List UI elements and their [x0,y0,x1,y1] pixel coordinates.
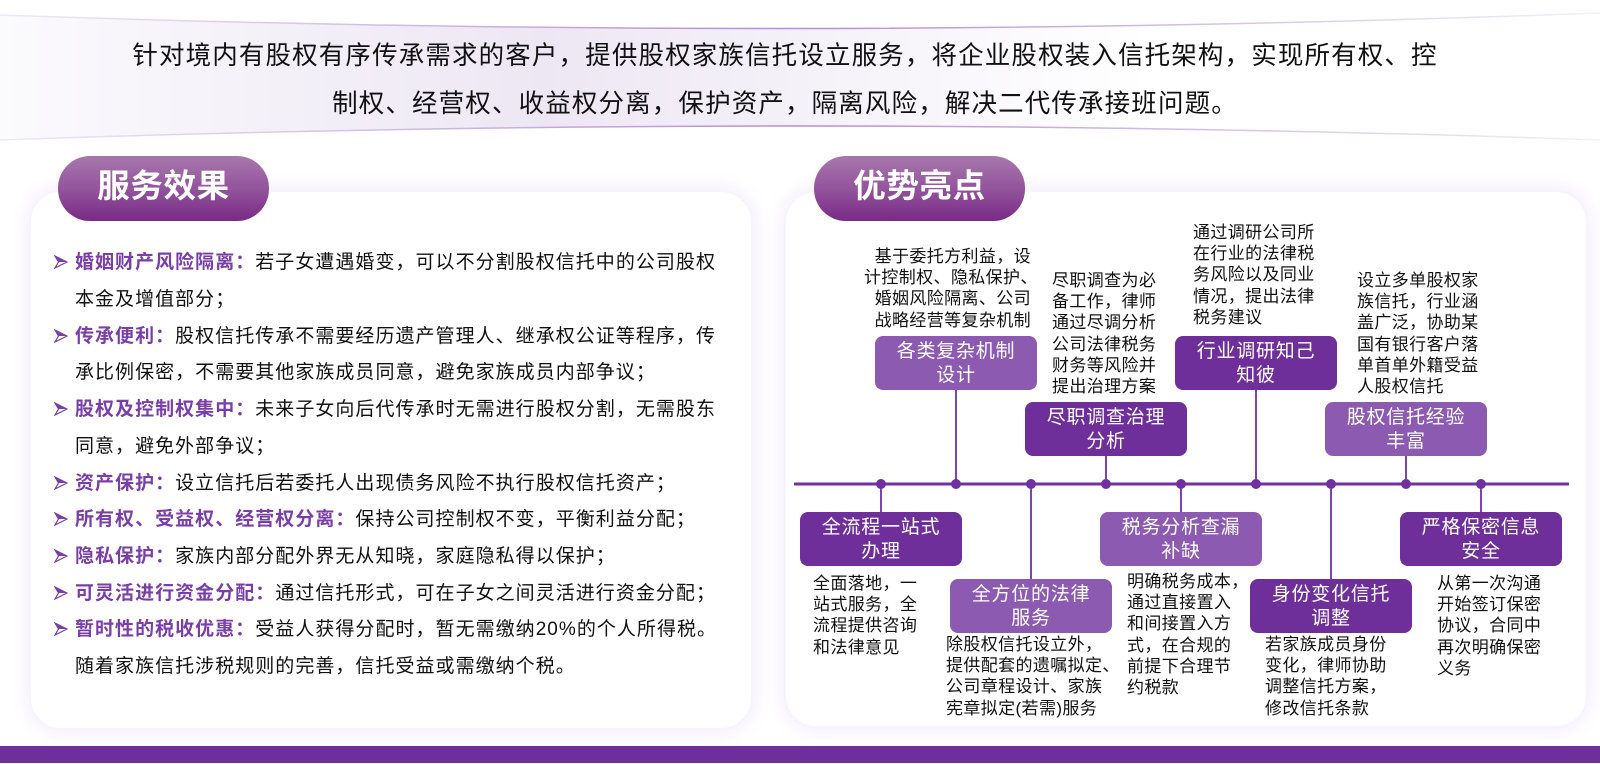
service effects list: 承比例保密，不需要其他家族成员同意，避免家族成员内部争议； [75,362,656,383]
service effects list: 婚姻财产风险隔离：若子女遭遇婚变，可以不分割股权信托中的公司股权 [75,252,716,273]
text: tax analysis [1127,572,1249,697]
node: confidentiality: 安全 [1461,540,1501,562]
node: due diligence: 尽职调查治理 [1047,406,1165,428]
text: due diligence: 提出治理方案 [1052,377,1156,396]
node: legal services [950,579,1112,633]
node: trust experience: 股权信托经验 [1347,406,1465,428]
text: one-stop service [813,574,917,657]
node: complex mechanism design [875,336,1037,390]
node: identity change [1250,579,1412,633]
text: legal services: 宪章拟定(若需)服务 [946,699,1097,718]
service effects list: 同意，避免外部争议； [75,436,275,457]
text: legal services: 提供配套的遗嘱拟定、 [946,656,1120,675]
node: tax analysis [1100,512,1262,566]
node: identity change: 调整 [1311,608,1351,628]
service effects list: 隐私保护：家族内部分配外界无从知晓，家庭隐私得以保护； [75,546,616,567]
text: trust experience: 单首单外籍受益 [1357,356,1479,375]
node: tax analysis: 补缺 [1161,540,1201,562]
text: one-stop service: 和法律意见 [813,638,900,657]
text: one-stop service: 流程提供咨询 [813,616,917,635]
text: legal services: 公司章程设计、家族 [946,677,1102,696]
text: complex mechanism design: 基于委托方利益，设 [875,247,1031,266]
text: complex mechanism design: 婚姻风险隔离、公司 [875,289,1031,308]
text: due diligence: 通过尽调分析 [1052,313,1156,332]
service effects list: 传承便利：股权信托传承不需要经历遗产管理人、继承权公证等程序，传 [75,326,716,347]
node: complex mechanism design: 设计 [936,364,976,386]
text: industry research: 税务建议 [1193,308,1263,327]
text: due diligence: 尽职调查为必 [1052,271,1156,290]
text: confidentiality: 从第一次沟通 [1437,574,1541,593]
timeline chart [794,390,1569,579]
node: complex mechanism design: 各类复杂机制 [897,340,1015,362]
node: legal services: 服务 [1011,608,1051,628]
intro banner [0,12,1600,141]
text: tax analysis: 式，在合规的 [1127,636,1231,655]
intro banner: 制权、经营权、收益权分离，保护资产，隔离风险，解决二代传承接班问题。 [332,90,1238,118]
text: confidentiality: 协议，合同中 [1437,616,1541,635]
text: trust experience: 人股权信托 [1357,377,1444,396]
service effects list: 资产保护：设立信托后若委托人出现债务风险不执行股权信托资产； [75,473,676,494]
service effects list [54,252,717,677]
text: tax analysis: 明确税务成本， [1127,572,1249,591]
text: confidentiality: 再次明确保密 [1437,638,1541,657]
node: due diligence: 分析 [1086,430,1126,452]
heading: service effects: 服务效果 [97,168,230,204]
service effects list: 本金及增值部分； [75,289,235,310]
node: industry research [1175,336,1337,390]
text: due diligence [1052,271,1156,396]
node: due diligence [1025,402,1187,456]
text: legal services: 除股权信托设立外， [946,635,1102,654]
text: trust experience: 族信托，行业涵 [1357,292,1479,311]
heading: advantages: 优势亮点 [853,168,986,204]
text: confidentiality: 义务 [1437,659,1472,678]
panel: service effects [31,192,751,728]
text: identity change: 若家族成员身份 [1265,635,1387,654]
text: trust experience [1357,271,1479,396]
text: trust experience: 国有银行客户落 [1357,335,1479,354]
text: industry research: 务风险以及同业 [1193,265,1315,284]
text: trust experience: 设立多单股权家 [1357,271,1479,290]
heading: service effects [58,156,269,221]
node: identity change: 身份变化信托 [1272,584,1390,604]
node: one-stop service: 全流程一站式 [822,516,940,538]
text: identity change: 调整信托方案， [1265,677,1387,696]
text: tax analysis: 前提下合理节 [1127,657,1231,676]
text: industry research: 情况，提出法律 [1193,287,1315,306]
text: identity change [1265,635,1387,718]
node: industry research: 知彼 [1236,364,1276,386]
text: one-stop service: 全面落地，一 [813,574,917,593]
text: complex mechanism design [864,247,1038,330]
text: confidentiality: 开始签订保密 [1437,595,1541,614]
text: identity change: 变化，律师协助 [1265,656,1387,675]
footer bar [0,746,1600,763]
text: identity change: 修改信托条款 [1265,699,1369,718]
text: confidentiality [1437,574,1541,678]
node: trust experience [1325,402,1487,456]
text: tax analysis: 通过直接置入 [1127,593,1231,612]
node: one-stop service: 办理 [861,540,901,562]
text: due diligence: 财务等风险并 [1052,356,1156,375]
text: due diligence: 备工作，律师 [1052,292,1156,311]
text: due diligence: 公司法律税务 [1052,335,1156,354]
panel: advantages [786,192,1586,726]
text: industry research: 通过调研公司所 [1193,223,1315,242]
service effects list: 股权及控制权集中：未来子女向后代传承时无需进行股权分割，无需股东 [75,399,716,420]
service effects list: 所有权、受益权、经营权分离：保持公司控制权不变，平衡利益分配； [75,509,696,530]
heading: advantages [814,156,1025,221]
service effects list: 暂时性的税收优惠：受益人获得分配时，暂无需缴纳20%的个人所得税。 [75,619,717,640]
service effects list: 可灵活进行资金分配：通过信托形式，可在子女之间灵活进行资金分配； [75,583,716,604]
text: complex mechanism design: 战略经营等复杂机制 [875,311,1031,330]
text: complex mechanism design: 计控制权、隐私保护、 [864,268,1038,287]
text: legal services [946,635,1120,718]
text: industry research [1193,223,1315,327]
node: confidentiality [1400,512,1562,566]
node: confidentiality: 严格保密信息 [1422,516,1540,538]
intro banner: 针对境内有股权有序传承需求的客户，提供股权家族信托设立服务，将企业股权装入信托架构，实现所有权、控 [132,42,1438,70]
text: tax analysis: 约税款 [1127,678,1179,697]
node: industry research: 行业调研知己 [1197,340,1315,362]
text: tax analysis: 和间接置入方 [1127,614,1231,633]
node: legal services: 全方位的法律 [972,584,1090,604]
node: tax analysis: 税务分析查漏 [1122,516,1240,538]
node: one-stop service [800,512,962,566]
text: industry research: 在行业的法律税 [1193,244,1315,263]
node: trust experience: 丰富 [1386,430,1426,452]
text: trust experience: 盖广泛，协助某 [1357,313,1479,332]
service effects list: 随着家族信托涉税规则的完善，信托受益或需缴纳个税。 [75,656,576,677]
text: one-stop service: 站式服务，全 [813,595,917,614]
